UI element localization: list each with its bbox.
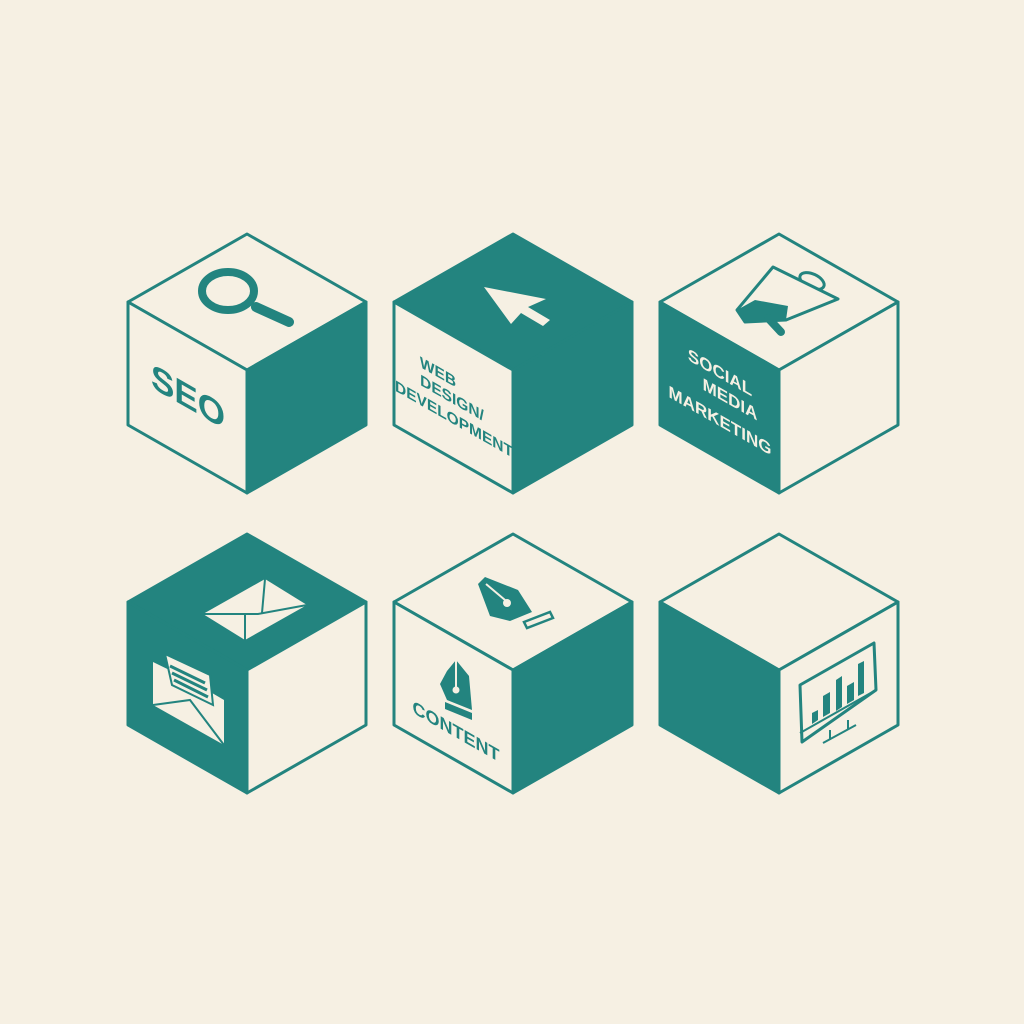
label: web design/development bbox=[395, 339, 514, 462]
label: web design/development: DESIGN/ bbox=[420, 371, 484, 425]
label: social media marketing bbox=[669, 333, 771, 459]
icon: pen nib top bbox=[478, 577, 553, 628]
label: SEO: SEO bbox=[151, 356, 225, 437]
cube: SEO bbox=[128, 234, 366, 493]
icon: cursor bbox=[484, 287, 550, 326]
icon: monitor chart bbox=[800, 643, 876, 743]
cube: content bbox=[394, 534, 632, 793]
cube: social media bbox=[660, 234, 898, 493]
label: social media marketing: SOCIAL bbox=[688, 344, 752, 400]
label: social media marketing: MARKETING bbox=[669, 381, 771, 459]
icon: megaphone bbox=[737, 267, 838, 332]
label: content: CONTENT bbox=[413, 697, 500, 767]
icon: open envelope with letter bbox=[153, 654, 224, 745]
cube: analytics bbox=[660, 534, 898, 793]
label: web design/development: DEVELOPMENT bbox=[395, 377, 514, 462]
label: web design/development: WEB bbox=[420, 353, 456, 391]
icon: pen nib face bbox=[440, 658, 472, 720]
cube: web design bbox=[394, 234, 632, 493]
icon: envelope top bbox=[203, 579, 307, 640]
icon: magnifier bbox=[202, 272, 289, 322]
label: social media marketing: MEDIA bbox=[703, 374, 757, 424]
cube: email bbox=[128, 534, 366, 793]
